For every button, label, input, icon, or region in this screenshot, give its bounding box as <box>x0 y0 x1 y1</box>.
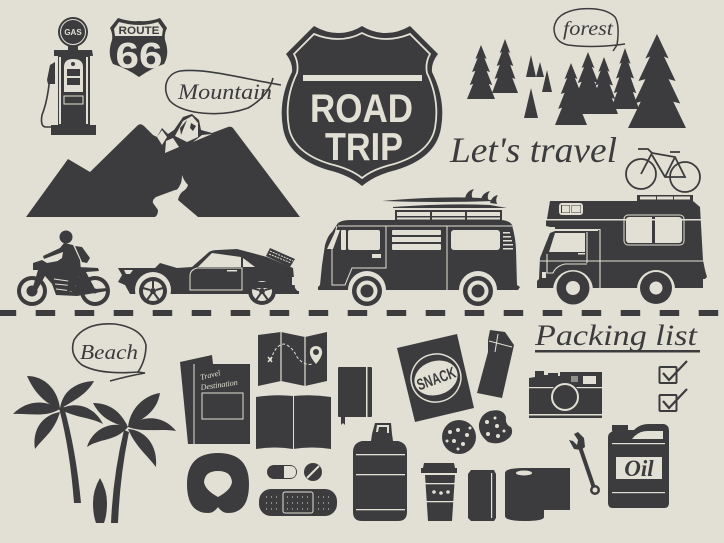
pills <box>267 463 322 481</box>
windows <box>540 203 705 288</box>
icon: bicycle on roof <box>626 149 700 192</box>
camper van with surfboards <box>318 189 520 309</box>
title shield: road trip: ROAD <box>310 87 413 131</box>
van body <box>318 220 520 290</box>
wrench <box>569 432 600 495</box>
surfboards <box>382 189 507 208</box>
open book <box>256 395 331 449</box>
travel folder: Destination <box>199 378 238 392</box>
wheels <box>135 272 299 308</box>
snack bag <box>397 334 474 422</box>
dashed road line <box>0 310 724 316</box>
icon: route 66 shield: 66 <box>116 35 162 76</box>
speech bubble: mountain: Mountain <box>177 79 272 104</box>
neck pillow <box>187 453 249 513</box>
forest trees <box>467 34 686 128</box>
bandage <box>259 489 337 516</box>
icon: gas pump: GAS <box>64 28 82 37</box>
roof rack <box>395 210 502 222</box>
snack bag: SNACK <box>415 364 459 394</box>
rocky peak <box>157 116 212 153</box>
icon: gas pump <box>42 17 96 135</box>
rider <box>43 230 90 291</box>
icon: route 66 shield: ROUTE <box>118 25 160 37</box>
oil jug <box>608 424 669 508</box>
muscle car <box>118 248 299 308</box>
van wheels <box>348 271 497 309</box>
speech bubble: forest: forest <box>563 18 613 40</box>
motorcycle with rider <box>17 230 110 306</box>
checklist <box>660 361 687 411</box>
wheels <box>553 270 675 310</box>
windows <box>327 230 513 258</box>
water jug <box>353 423 407 521</box>
icon: route 66 shield <box>110 18 167 77</box>
folded map <box>258 332 327 386</box>
oil jug: Oil <box>624 456 654 481</box>
paper towel roll <box>505 468 570 521</box>
handwritten heading: let's travel: Let's travel <box>449 130 617 170</box>
speech bubble: beach <box>73 324 146 381</box>
palm trees and surfboard <box>13 376 176 523</box>
notebook <box>338 367 372 425</box>
roof rack <box>637 195 693 201</box>
bottle pouch <box>477 330 514 398</box>
body <box>537 201 707 288</box>
motorhome <box>537 195 707 310</box>
title shield: road trip: TRIP <box>325 126 403 169</box>
title shield: road trip <box>282 26 442 186</box>
icon: mountain with road <box>26 114 300 217</box>
cookies <box>442 410 512 454</box>
camera <box>529 371 602 418</box>
speech bubble: mountain <box>166 70 281 114</box>
speech bubble: forest <box>554 9 625 51</box>
luggage <box>266 248 295 267</box>
drink can <box>468 470 496 521</box>
speech bubble: beach: Beach <box>80 340 138 364</box>
coffee cup <box>421 463 457 521</box>
travel folder <box>180 355 250 444</box>
handwritten heading: packing list: Packing list <box>534 319 698 352</box>
travel folder: Travel <box>199 368 222 382</box>
